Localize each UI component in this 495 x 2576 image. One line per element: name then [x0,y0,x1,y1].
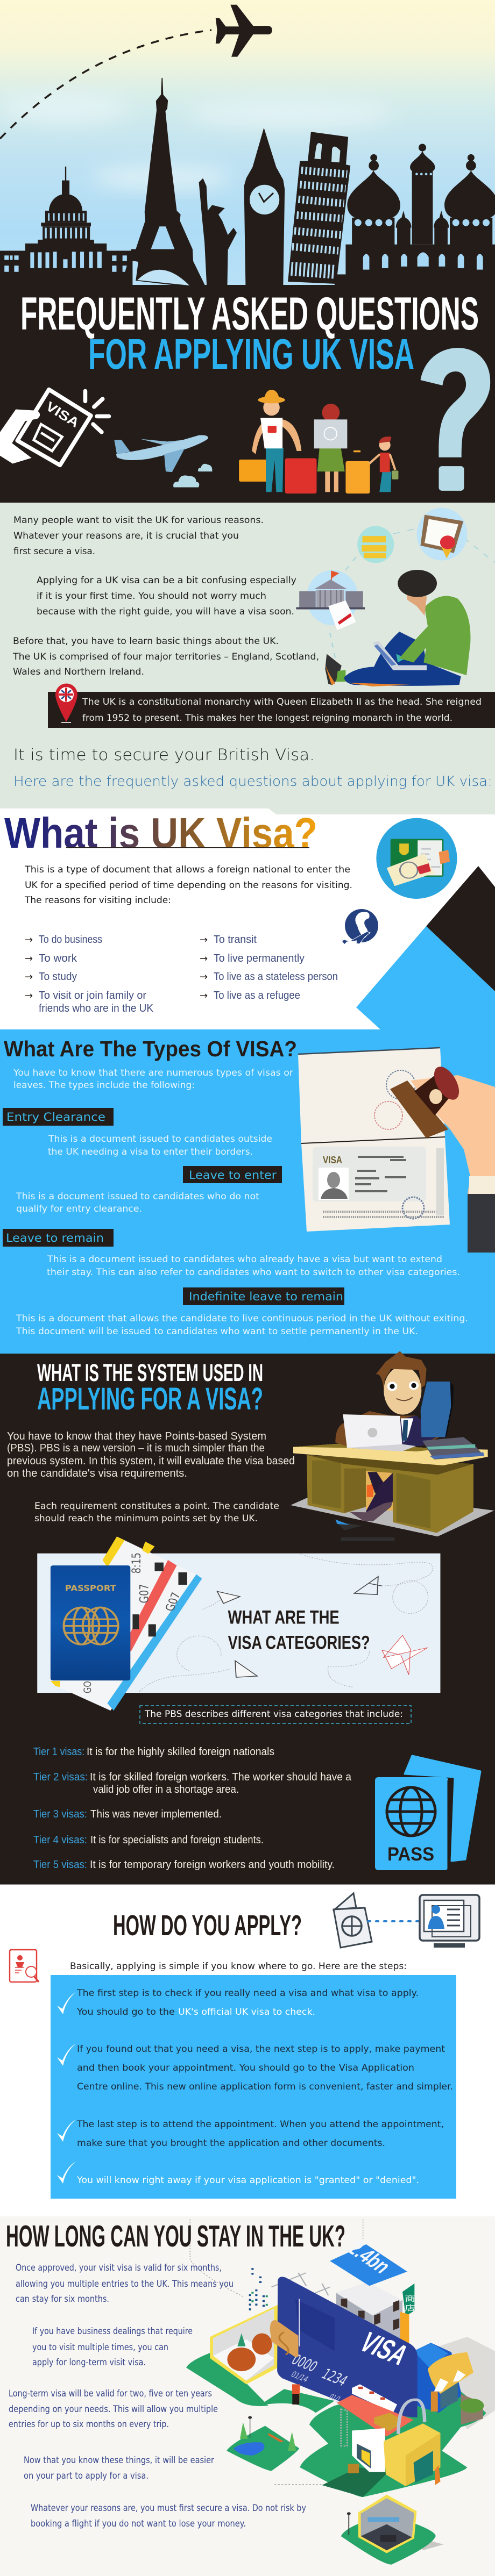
panel: types of visa [0,1029,495,1354]
passport [51,1565,130,1680]
subheading: secure visa [13,746,492,790]
banner: visa categories [37,1536,440,1711]
list: reasons right: → [200,953,208,964]
list: reasons right: To live as a refugee [214,990,300,1001]
panel: points based system [0,1351,495,1885]
text block: leave to remain: This is a document issued to candidates who already have a visa but want to extend [47,1254,442,1265]
capitol windows [4,143,340,285]
tier 4: Tier 4 visas: [33,1834,87,1846]
illustration: passport being stamped: VISA [323,1155,342,1165]
text block: PBS: previous system. In this system, it will evaluate the visa based [7,1455,295,1467]
text block: stay 2: you to visit multiple times, you can [32,2342,168,2353]
passport: PASSPORT [65,1584,116,1593]
text block: intro 3: Before that, you have to learn basic things about the UK. [13,636,279,647]
text block: intro 2: if it is your first time. You should not worry much [37,591,266,602]
text block: PBS [7,1430,295,1479]
text block: intro 2 [37,575,296,617]
text block: apply intro: Basically, applying is simple if you know where to go. Here are the steps: [70,1961,407,1972]
list: reasons left: To work [39,953,77,964]
dotted pixels [250,2268,264,2311]
step 1: UK's official UK visa to check. [178,2007,315,2017]
icon: passport pass [375,1756,480,1870]
title [20,288,479,378]
label: entry clearance: Entry Clearance [6,1111,105,1124]
text block: intro 2: because with the right guide, you will have a visa soon. [37,606,294,617]
visa card: 0000 [288,2352,321,2375]
text block: stay 1: can stay for six months. [16,2294,109,2305]
label: leave to remain [3,1229,114,1247]
boarding passes [51,1536,202,1711]
text block: intro 1 [13,515,264,557]
text block: indefinite leave: This is a document that allows the candidate to live continuous period in the UK without exiting. [16,1313,468,1324]
panel: how long can you stay [0,2216,495,2576]
text block: stay 5: Whatever your reasons are, you must first secure a visa. Do not risk by [31,2503,306,2514]
list: reasons left: → [25,990,33,1001]
left cafe room [210,2305,278,2384]
step 1: You should go to the [76,2007,175,2017]
step 2: and then book your appointment. You should go to the Visa Application [77,2063,414,2073]
boarding passes: G07 [137,1584,151,1603]
list: reasons right: → [200,934,208,946]
shelf and counter [337,2384,414,2473]
padlock [384,2400,440,2486]
panel: how do you apply [0,1885,495,2216]
illustration: passport being stamped [298,1048,495,1253]
list: reasons left: To visit or join family or [39,990,146,1001]
illustration: isometric visa card city [186,2220,495,2565]
bottom room [341,2495,436,2565]
text block: intro 1: first secure a visa. [13,546,95,557]
illustration: man at desk [291,1351,494,1541]
text block: intro 2: Applying for a UK visa can be a bit confusing especially [37,575,296,586]
rooftop sign [330,2237,407,2286]
icon: check 1 [57,1992,76,2014]
tier 2 [33,1771,352,1795]
text block: leave to enter: This is a document issued to candidates who do not [16,1191,259,1202]
hero panel [0,0,495,503]
step 2 [77,2044,453,2092]
step 3 [76,2119,444,2149]
icon: hand holding visa: VISA [43,399,82,431]
green ground [186,2351,335,2413]
text block: intro 3: The UK is comprised of four major territories – England, Scotland, [12,652,319,662]
list: reasons left: → [25,934,33,946]
heading: VISA CATEGORIES? [228,1633,370,1653]
callout: PBS categories [140,1706,411,1723]
label: leave to enter: Leave to enter [189,1169,277,1182]
text block: leave to enter: qualify for entry clearance. [16,1204,142,1214]
text block: PBS: (PBS). PBS is a new version – it is much simpler than the [7,1442,265,1454]
illustration: student with laptop and goals [296,508,495,686]
building: 商 [405,2294,415,2303]
label: indefinite leave to remain [183,1287,344,1305]
callout: monarchy: The UK is a constitutional monarchy with Queen Elizabeth II as the head. She reigned [82,697,482,707]
palace windows [355,173,490,270]
tier 1: It is for the highly skilled foreign nationals [87,1746,274,1758]
text block: intro 3: Wales and Northern Ireland. [13,667,144,677]
boarding passes: 8:15 [129,1552,144,1573]
panel: what is UK visa [0,808,495,1029]
paper planes and dotted routes [139,1554,433,1692]
text block: stay 3: depending on your needs. This will allow you multiple [9,2404,218,2415]
icon: passport pass: PASS [387,1844,434,1865]
list: reasons left: → [25,953,33,964]
icon: airplane [216,5,272,57]
text block: stay 4 [24,2455,214,2481]
text block: stay 3: Long-term visa will be valid for two, five or ten years [9,2388,212,2399]
tier 3 [33,1808,222,1820]
step 3: make sure that you brought the application and other documents. [77,2138,385,2149]
label: entry clearance [3,1108,114,1126]
text block: stay 2: apply for long-term visit visa. [32,2357,146,2368]
list: reasons left: To study [39,971,77,983]
text block: types intro: leaves. The types include the following: [13,1080,195,1091]
text block: stay 5 [31,2503,306,2529]
park [227,2416,299,2471]
tier 5: Tier 5 visas: [33,1859,87,1871]
text block: stay 4: Now that you know these things, it will be easier [24,2455,214,2466]
text block: entry clearance: the UK needing a visa to enter their borders. [48,1147,253,1157]
text block: definition: UK for a specified period of time depending on the reasons for visiting. [25,880,352,891]
list: reasons right: To transit [214,934,257,946]
list: reasons right: To live permanently [214,953,305,964]
list: reasons left: To do business [39,934,102,946]
text block: definition: The reasons for visiting include: [24,895,171,906]
heading [37,1359,263,1416]
icon: map pin flag [55,684,77,723]
hand and sleeve [411,1075,495,1194]
heading: APPLYING FOR A VISA? [37,1382,263,1416]
icon: question mark [420,348,490,491]
tier 4: It is for specialists and foreign students. [90,1834,264,1846]
ground shadows [411,2337,495,2429]
right shop [414,2343,484,2424]
text block: leave to remain: their stay. This can also refer to candidates who want to switch to other visa categories. [47,1267,460,1278]
panel: introduction [0,503,495,814]
text block: stay 1: allowing you multiple entries to the UK. This means you [16,2279,234,2289]
text block: indefinite leave [16,1313,468,1337]
visa card: 01/14 [289,2370,310,2384]
subheading: secure visa: It is time to secure your British Visa. [13,746,315,764]
list: reasons right: → [200,990,208,1001]
step 1: The first step is to check if you really need a visa and what visa to apply. [76,1988,419,1999]
label: leave to enter [183,1166,282,1183]
list: reasons right: → [200,971,208,983]
icon: passport badge [376,818,457,899]
text block: types intro [13,1068,293,1091]
boarding passes: G07 [162,1591,183,1613]
tier 2: valid job offer in a shortage area. [93,1784,239,1795]
rooftop pylons [272,2273,330,2301]
text block: stay 1 [16,2263,234,2305]
text block: requirement points: Each requirement constitutes a point. The candidate [34,1501,279,1512]
text block: stay 3 [9,2388,218,2430]
list: reasons left [25,934,154,1014]
text block: stay 1: Once approved, your visit visa is valid for six months, [16,2263,222,2273]
rooftop sign: 2.4bn [342,2237,396,2278]
tier 2: Tier 2 visas: [33,1771,88,1783]
illustration: travelling family [239,390,398,493]
text block: intro 1: Many people want to visit the UK for various reasons. [13,515,264,526]
text block: stay 2 [32,2326,193,2368]
text block: stay 5: booking a flight if you do not want to lose your money. [31,2518,246,2529]
step 2: Centre online. This new online application form is convenient, faster and simpler. [77,2081,453,2092]
label: indefinite leave to remain: Indefinite leave to remain [189,1290,343,1303]
list: tier visas [33,1746,352,1871]
step 3: The last step is to attend the appointment. When you attend the appointment, [76,2119,444,2130]
label: leave to remain: Leave to remain [6,1232,104,1244]
boarding passes: GO [81,1681,93,1693]
tier 2: It is for skilled foreign workers. The worker should have a [90,1771,352,1783]
text block: requirement points [34,1501,279,1524]
skyline silhouettes [0,78,495,287]
panel: steps [51,1975,456,2199]
step 2: If you found out that you need a visa, the next step is to apply, make payment [77,2044,445,2055]
visa card [270,2277,418,2417]
visa card: 01/1 [327,2392,343,2405]
heading: HOW DO YOU APPLY? [113,1909,302,1942]
text block: leave to enter [16,1191,259,1214]
tier 1: Tier 1 visas: [33,1746,84,1758]
building [336,2282,415,2346]
building: 店 [405,2304,415,2313]
subheading: secure visa: Here are the frequently asked questions about applying for UK visa: [13,774,492,790]
icon: check 4 [57,2162,76,2184]
tier 3: Tier 3 visas: [33,1808,87,1820]
list: reasons right [200,934,338,1001]
text block: stay 2: If you have business dealings that require [32,2326,193,2337]
icon: check 2 [57,2044,76,2066]
heading: WHAT ARE THE [228,1607,340,1628]
icon: passenger jet and clouds [114,435,212,487]
tier 3: This was never implemented. [90,1808,222,1820]
icon: passport to online application [334,1893,479,1948]
text block: types intro: You have to know that there are numerous types of visas or [13,1068,293,1078]
text block: intro 1: Whatever your reasons are, it is crucial that you [13,531,239,541]
text block: definition [24,864,352,906]
step 1 [76,1988,419,2017]
visa card: VISA [353,2327,415,2371]
tier 5: It is for temporary foreign workers and youth mobility. [90,1859,335,1871]
text block: intro 3 [12,636,319,677]
text block: entry clearance: This is a document issued to candidates outside [48,1134,272,1144]
list: reasons left: → [25,971,33,983]
text block: entry clearance [48,1134,272,1157]
text block: requirement points: should reach the minimum points set by the UK. [34,1513,258,1524]
callout: monarchy [48,684,495,728]
pisa windows [291,170,347,272]
heading: What is UK Visa? [4,809,317,857]
text block: PBS: You have to know that they have Points-based System [7,1430,266,1442]
icon: red document search [10,1950,39,1982]
list: reasons left: friends who are in the UK [39,1003,154,1014]
heading: What Are The Types Of VISA? [4,1036,297,1061]
text block: definition: This is a type of document that allows a foreign national to enter the [24,864,350,875]
icon: globe and plane [342,909,378,944]
step 4: You will know right away if your visa application is "granted" or "denied". [76,2175,419,2186]
text block: PBS: on the candidate's visa requirements. [7,1468,187,1479]
visa card: 1234 [318,2366,351,2389]
flight path [0,30,211,139]
heading: WHAT IS THE SYSTEM USED IN [37,1359,263,1386]
text block: stay 4: on your part to apply for a visa. [24,2471,148,2481]
heading [228,1607,370,1653]
list: reasons right: To live as a stateless person [214,971,338,983]
icon: hand holding visa [0,390,109,465]
text block: indefinite leave: This document will be issued to candidates who want to settle permanently in the UK. [16,1326,418,1337]
callout: monarchy: from 1952 to present. This makes her the longest reigning monarch in the world. [82,713,452,724]
callout: PBS categories: The PBS describes different visa categories that include: [144,1709,403,1720]
icon: check 3 [57,2120,76,2142]
text block: leave to remain [47,1254,460,1278]
text block: stay 3: entries for up to six months on every trip. [9,2419,169,2430]
